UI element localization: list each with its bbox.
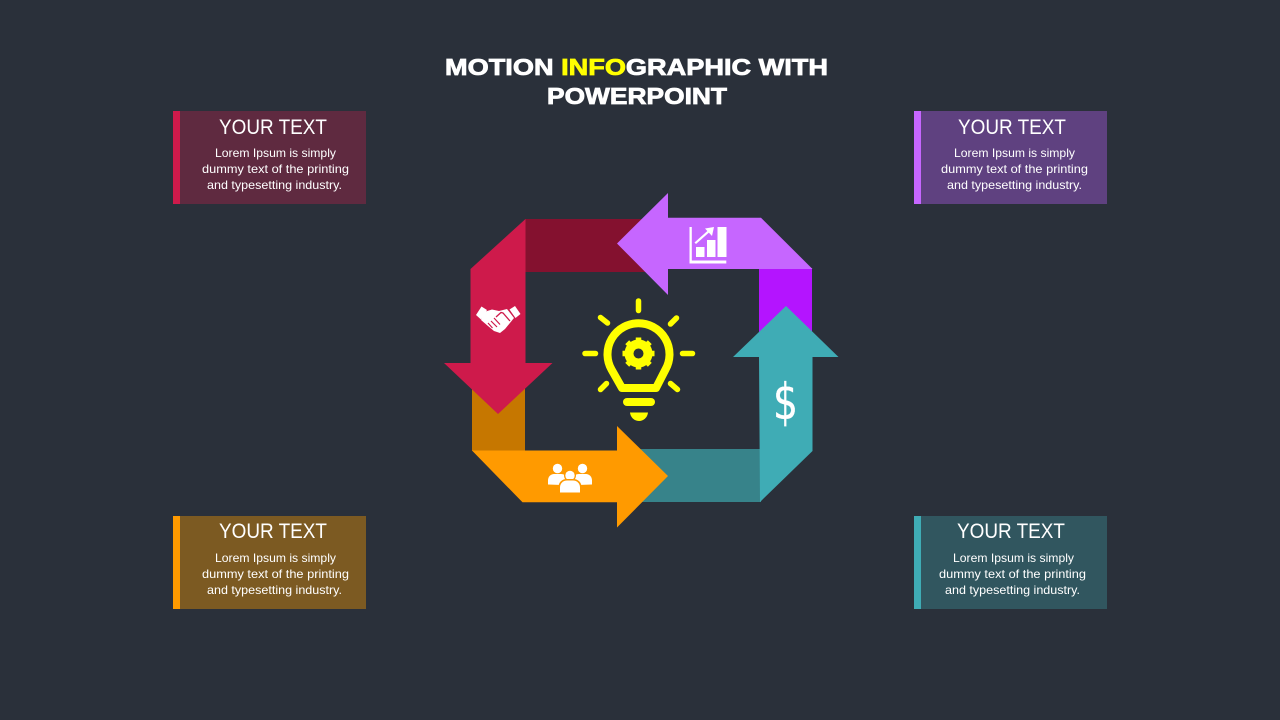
panel: top left text box: YOUR TEXT: [219, 116, 327, 139]
rays: [585, 301, 692, 390]
panel: top left text box: Lorem Ipsum is simply: [215, 146, 336, 160]
panel: top right text box: and typesetting industry.: [947, 178, 1082, 192]
panel: bottom left text box: and typesetting industry.: [207, 583, 342, 597]
panel: bottom right text box: dummy text of the printing: [939, 567, 1086, 581]
arrow fold: dark teal: [635, 449, 761, 502]
panel: bottom left text box: YOUR TEXT: [219, 520, 327, 543]
panel: bottom right text box: Lorem Ipsum is simply: [953, 551, 1074, 565]
title: [445, 54, 828, 109]
panel: bottom right text box: and typesetting industry.: [945, 583, 1080, 597]
panel: top right text box: Lorem Ipsum is simply: [954, 146, 1075, 160]
arrow: orange: [472, 426, 668, 528]
arrow: red: [444, 219, 552, 414]
icon: team of people: [548, 464, 592, 492]
bulb base: [623, 398, 655, 406]
panel: top left text box: [173, 111, 366, 204]
panel: top right text box: YOUR TEXT: [958, 116, 1066, 139]
icon: light bulb with gear: [585, 301, 692, 421]
panel: bottom right text box: [914, 516, 1107, 609]
panel: top left text box: dummy text of the printing: [202, 162, 349, 176]
icon: dollar sign: $: [773, 373, 798, 431]
arrow fold: dark orange: [472, 385, 525, 451]
arrow fold: magenta: [759, 268, 812, 338]
arrow: teal: [733, 306, 838, 502]
panel: top left text box: and typesetting industry.: [207, 178, 342, 192]
arrow: purple: [617, 193, 812, 295]
bulb tip: [630, 412, 648, 421]
panel: top right text box: dummy text of the printing: [941, 162, 1088, 176]
icon: bar chart: [690, 227, 726, 264]
panel: bottom right text box: YOUR TEXT: [957, 520, 1065, 543]
panel: bottom left text box: dummy text of the printing: [202, 567, 349, 581]
bulb outline: [608, 323, 670, 388]
panel: bottom left text box: Lorem Ipsum is simply: [215, 551, 336, 565]
cycle diagram: [444, 193, 838, 528]
arrow fold: dark red: [525, 219, 650, 272]
title: MOTION INFO GRAPHIC WITH: [445, 54, 828, 80]
panel: bottom left text box: [173, 516, 366, 609]
gear: [622, 338, 654, 370]
icon: handshake: [476, 306, 520, 333]
title: POWERPOINT: [547, 83, 728, 109]
panel: top right text box: [914, 111, 1107, 204]
